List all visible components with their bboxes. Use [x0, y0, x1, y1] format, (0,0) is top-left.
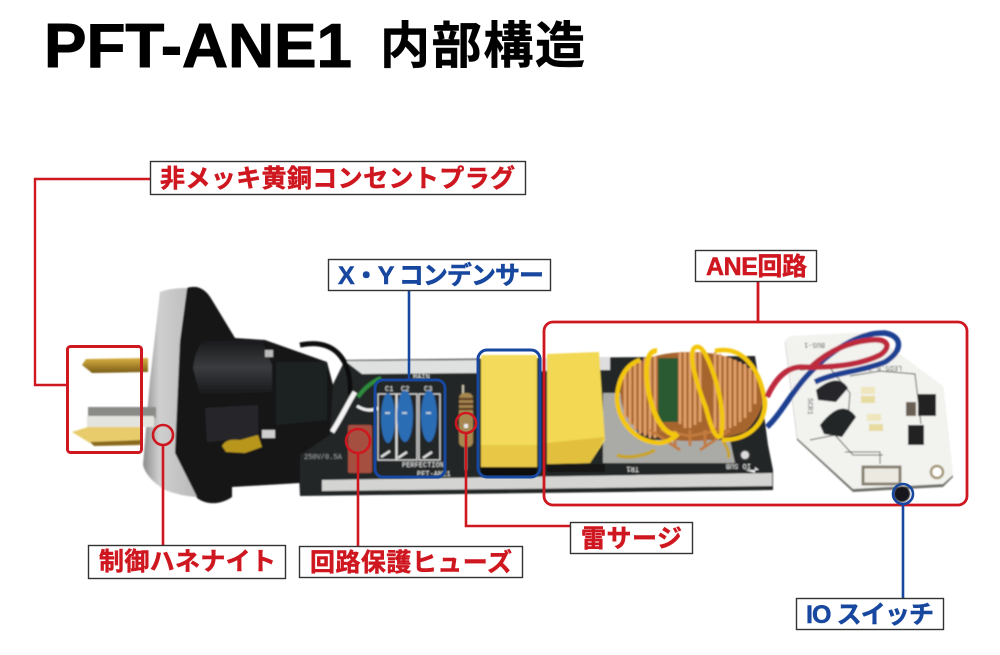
label: IO switch: IO スイッチ — [806, 601, 934, 629]
callout: ANE circuit — [544, 282, 967, 505]
title — [44, 12, 585, 81]
blue capacitors: C2 — [401, 386, 409, 394]
callout: IO switch — [893, 484, 913, 598]
label: lightning surge: 雷サージ — [581, 525, 682, 553]
callout: control blade nut — [153, 425, 173, 545]
LED switch board — [785, 332, 953, 502]
product photo: power plug internals — [72, 287, 953, 503]
plug housing — [143, 287, 333, 503]
callout: brass plug blades — [35, 179, 150, 452]
yellow capacitors — [481, 352, 605, 476]
callout: protection fuse — [346, 429, 370, 546]
LED switch board: SCR1 — [805, 398, 813, 415]
LED switch board: LED5.6.7.8 — [860, 363, 902, 371]
surge resistor — [459, 385, 473, 470]
label: non-plated brass plug: 非メッキ黄銅コンセントプラグ — [160, 164, 515, 193]
circuit board strip: PERFECTION — [402, 462, 444, 470]
callout: X/Y capacitors — [375, 291, 445, 477]
label: ANE circuit: ANE回路 — [706, 253, 807, 281]
circuit board strip: IO SUB — [726, 461, 751, 469]
fuse — [348, 425, 372, 473]
callout: surge capacitor highlight — [478, 350, 540, 477]
circuit board strip — [298, 356, 773, 496]
callout: lightning surge — [456, 413, 570, 526]
brass plug blades — [72, 358, 156, 446]
LED switch board: BUS-1 — [804, 340, 825, 348]
wire loops — [300, 344, 381, 432]
blue capacitors: C3 — [424, 386, 432, 394]
title: PFT-ANE1 — [44, 12, 352, 81]
circuit board strip: MAIN — [413, 374, 430, 382]
label: protection fuse: 回路保護ヒューズ — [310, 548, 512, 577]
blue capacitors: C1 — [385, 386, 393, 394]
label: X/Y capacitors: X・Y コンデンサー — [338, 261, 544, 290]
circuit board strip: 250V/0.5A — [304, 454, 343, 462]
blue capacitors — [378, 386, 440, 460]
label: control blade nut: 制御ハネナイト — [99, 548, 276, 576]
red and blue wires — [767, 333, 899, 427]
circuit board strip: PFT-ANE1 — [417, 471, 451, 479]
toroid coil — [617, 347, 765, 458]
title: 内部構造 — [380, 18, 585, 74]
circuit board strip: TR1 — [626, 464, 639, 472]
